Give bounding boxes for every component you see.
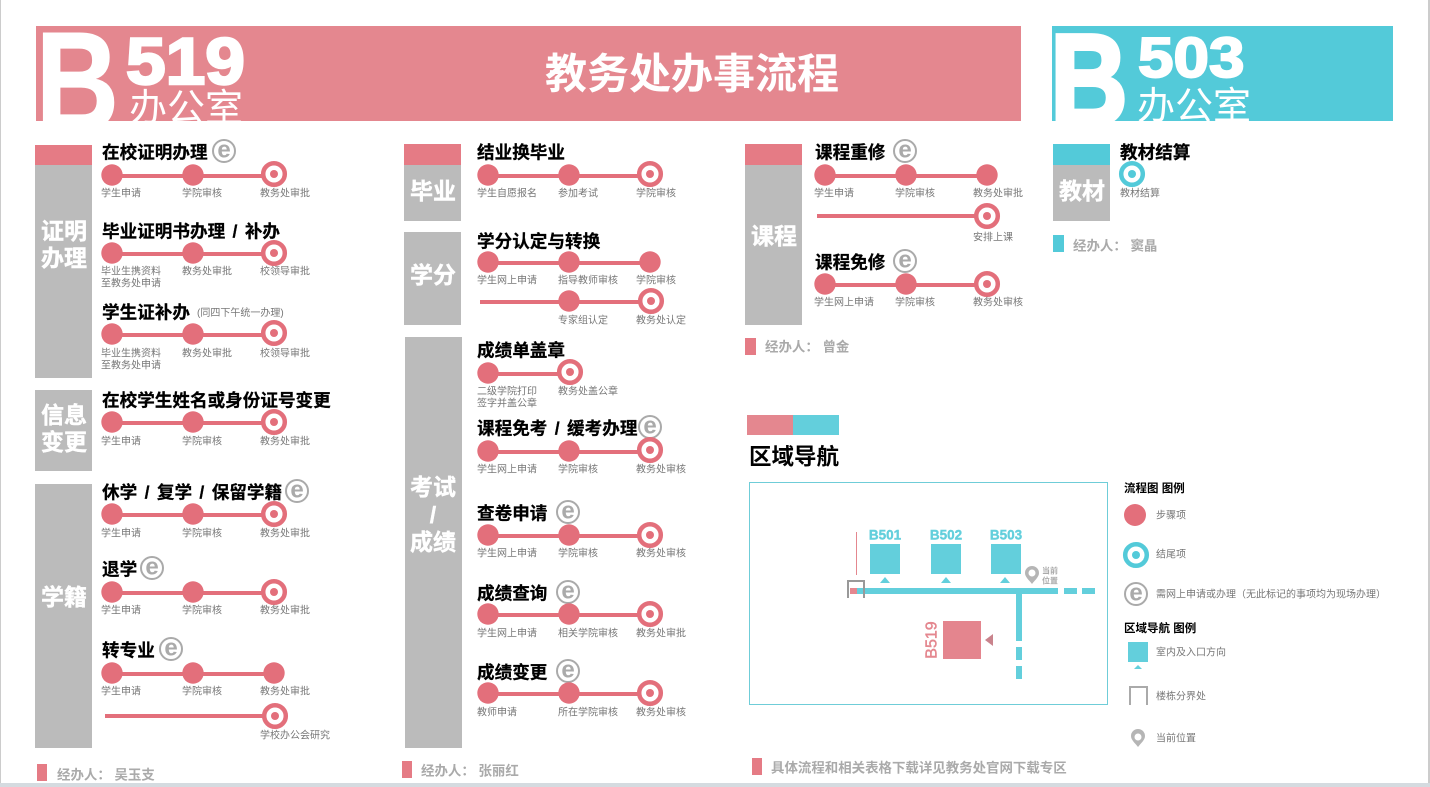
flow: 转专业: 转专业: [102, 640, 155, 660]
flow: 查卷申请: 学生网上申请: [477, 547, 537, 560]
legend item: boundary: 楼栋分界处: [1156, 690, 1206, 703]
flow: 课程重修: 课程重修: [815, 142, 886, 162]
legend item: step: 步骤项: [1156, 510, 1186, 522]
flow: 学分认定与转换: 学生网上申请: [477, 274, 537, 287]
legend: 区域导航 图例: 区域导航 图例: [1124, 621, 1196, 635]
flow: 课程免考 / 缓考办理: 学院审核: [558, 463, 598, 476]
flow: 结业换毕业: 学生自愿报名: [477, 187, 537, 200]
legend item: online: e: [1129, 580, 1143, 606]
flow: 结业换毕业: 参加考试: [558, 187, 598, 200]
flow: 退学: 教务处审批: [260, 604, 310, 617]
flow: 毕业证明书办理 / 补办: 校领导审批: [260, 265, 310, 278]
room B519: [924, 621, 993, 659]
category: 信息变更: [35, 390, 92, 471]
flow: 课程重修: [814, 136, 1023, 244]
flow: 学生证补办: 校领导审批: [260, 347, 310, 360]
heading: 区域导航: 区域导航: [749, 444, 840, 470]
current position pin: 位置: [1042, 576, 1058, 586]
room B502: B502: [930, 528, 962, 542]
flow: 课程免修: e: [898, 246, 912, 274]
flow: 课程免考 / 缓考办理: 教务处审核: [636, 463, 686, 476]
flow: 成绩单盖章: 二级学院打印: [477, 385, 537, 398]
flow: 成绩查询: [477, 578, 686, 640]
flow: 退学: [101, 554, 310, 617]
current position pin: 当前: [1042, 566, 1058, 576]
flow: 学分认定与转换: 学分认定与转换: [477, 232, 601, 252]
category: 教材: [1053, 144, 1110, 221]
category: 信息变更: 信息: [41, 402, 87, 428]
current position pin: [1025, 566, 1058, 586]
flow: 成绩查询: 成绩查询: [477, 584, 547, 604]
flow: 学分认定与转换: 学院审核: [636, 274, 676, 287]
category: 证明办理: [35, 145, 92, 378]
flow: 毕业证明书办理 / 补办: 至教务处申请: [101, 277, 161, 290]
flow: 休学 / 复学 / 保留学籍: 教务处审批: [260, 527, 310, 540]
legend item: room: 室内及入口方向: [1156, 646, 1226, 659]
room B519: B519: [924, 621, 940, 659]
flow: 在校学生姓名或身份证号变更: 教务处审批: [260, 435, 310, 448]
flow: 转专业: 教务处审批: [260, 685, 310, 698]
flow: 学分认定与转换: 教务处认定: [636, 314, 686, 327]
flow: 在校学生姓名或身份证号变更: 学生申请: [101, 435, 141, 448]
flow: 在校学生姓名或身份证号变更: 学院审核: [182, 435, 222, 448]
category: 学分: [404, 232, 461, 325]
flow: 在校证明办理: 学院审核: [182, 187, 222, 200]
flow: 教材结算: [1120, 142, 1190, 200]
flow: 查卷申请: 查卷申请: [477, 504, 548, 524]
flow: 在校证明办理: e: [217, 136, 231, 164]
flow: 成绩变更: 教务处审核: [636, 706, 686, 719]
legend item: end: 结尾项: [1156, 548, 1186, 561]
room B501: [869, 528, 902, 583]
flow: 课程免考 / 缓考办理: e: [643, 412, 657, 440]
legend item: end: [1125, 544, 1186, 566]
flow: 课程免修: 学生网上申请: [814, 296, 874, 309]
flow: 成绩单盖章: 成绩单盖章: [477, 340, 565, 360]
flow: 休学 / 复学 / 保留学籍: 休学 / 复学 / 保留学籍: [102, 482, 282, 502]
flow: 转专业: 学院审核: [182, 685, 222, 698]
flow: 成绩查询: e: [561, 578, 575, 604]
map: floor navigation: [750, 482, 1108, 704]
flow: 休学 / 复学 / 保留学籍: e: [290, 476, 304, 504]
flow: 学生证补办: 毕业生携资料: [101, 347, 161, 360]
flow: 课程重修: 教务处审批: [973, 187, 1023, 200]
header: B503 office banner: 办公室: [1137, 86, 1251, 128]
flow: 在校学生姓名或身份证号变更: [101, 390, 331, 448]
flow: 课程免考 / 缓考办理: 学生网上申请: [477, 463, 537, 476]
category: 毕业: 毕业: [410, 178, 456, 204]
category: 考试 / 成绩: /: [430, 502, 437, 528]
contact: 曾金: 经办人： 曾金: [765, 338, 850, 354]
flow: 课程免考 / 缓考办理: [477, 412, 686, 476]
category: 证明办理: 办理: [41, 245, 87, 271]
flow: 查卷申请: 教务处审核: [636, 547, 686, 560]
flow: 学分认定与转换: [477, 232, 686, 327]
flow: 查卷申请: 学院审核: [558, 547, 598, 560]
flow: 休学 / 复学 / 保留学籍: 学院审核: [182, 527, 222, 540]
flow: 成绩查询: 相关学院审核: [558, 627, 618, 640]
legend item: step: [1124, 504, 1186, 526]
category: 学籍: 学籍: [41, 584, 87, 610]
room B503: B503: [990, 528, 1023, 542]
flow: 课程免修: 课程免修: [815, 252, 886, 272]
flow: 课程免修: 学院审核: [895, 296, 935, 309]
category: 信息变更: 变更: [41, 429, 87, 455]
flow: 学生证补办: 教务处审批: [182, 347, 232, 360]
flow: 转专业: 学生申请: [101, 685, 141, 698]
flow: 结业换毕业: 结业换毕业: [477, 142, 565, 162]
contact: 窦晶: [1053, 235, 1157, 254]
flow: 在校证明办理: 教务处审批: [260, 187, 310, 200]
legend item: pin: 当前位置: [1156, 732, 1196, 745]
contact: 张丽红: 经办人： 张丽红: [421, 762, 519, 778]
legend: 区域导航 图例: [1124, 621, 1226, 747]
flow: 结业换毕业: 学院审核: [636, 187, 676, 200]
category: 毕业: [404, 144, 461, 221]
footer note: 具体流程和相关表格下载详见教务处官网下载专区: [771, 760, 1067, 776]
flow: 休学 / 复学 / 保留学籍: [101, 476, 310, 540]
flow: 成绩变更: e: [561, 656, 575, 684]
contact: 吴玉支: [37, 764, 155, 782]
flow: 查卷申请: e: [561, 498, 575, 524]
flow: 毕业证明书办理 / 补办: [101, 222, 310, 290]
flow: 休学 / 复学 / 保留学籍: 学生申请: [101, 527, 141, 540]
flow: 课程重修: e: [898, 136, 912, 164]
flow: 退学: 退学: [102, 560, 137, 580]
flow: 在校证明办理: 在校证明办理: [102, 142, 208, 162]
flow: 学生证补办: 学生证补办: [102, 302, 190, 322]
flow: 在校证明办理: [101, 136, 310, 200]
flow: 退学: 学院审核: [182, 604, 222, 617]
room B502: [930, 528, 962, 583]
flow: 成绩单盖章: [477, 340, 618, 410]
flow: 成绩变更: 教师申请: [477, 706, 517, 719]
flow: 查卷申请: [477, 498, 686, 560]
header: B519 office banner: 519: [126, 24, 245, 98]
legend: 流程图 图例: [1124, 481, 1386, 606]
title: 教务处办事流程: [545, 50, 839, 98]
header: B519 office banner: [36, 26, 1021, 121]
header: B519 office banner: 办公室: [129, 88, 243, 130]
contact: 吴玉支: 经办人： 吴玉支: [57, 766, 155, 782]
header: B519 office banner: B: [36, 3, 119, 161]
room B501: B501: [869, 528, 902, 542]
header: B503 office banner: 503: [1138, 25, 1244, 89]
flow: 成绩变更: [477, 656, 686, 719]
room B503: [990, 528, 1023, 583]
category: 考试 / 成绩: 考试: [410, 474, 456, 500]
flow: 学生证补办: (同四下午统一办理): [197, 306, 284, 319]
flow: 毕业证明书办理 / 补办: 毕业生携资料: [101, 265, 161, 278]
legend item: online: [1125, 580, 1386, 606]
flow: 教材结算: 教材结算: [1120, 187, 1160, 200]
flow: 在校学生姓名或身份证号变更: 在校学生姓名或身份证号变更: [102, 390, 331, 410]
flow: 成绩单盖章: 签字并盖公章: [477, 397, 537, 410]
category: 教材: 教材: [1059, 178, 1105, 204]
flow: 成绩变更: 成绩变更: [477, 662, 548, 682]
flow: 成绩单盖章: 教务处盖公章: [558, 385, 618, 398]
flow: 结业换毕业: [477, 142, 676, 200]
category: 考试 / 成绩: [405, 337, 462, 748]
flow: 课程免修: 教务处审核: [973, 296, 1023, 309]
category: 学分: 学分: [410, 262, 456, 288]
flow: 成绩查询: 教务处审批: [636, 627, 686, 640]
legend: 流程图 图例: 流程图 图例: [1124, 481, 1185, 495]
flow: 成绩查询: 学生网上申请: [477, 627, 537, 640]
header: B503 office banner: B: [1050, 8, 1128, 153]
flow: 退学: 学生申请: [101, 604, 141, 617]
flow: 转专业: [101, 634, 330, 742]
contact: 窦晶: 经办人： 窦晶: [1073, 238, 1157, 254]
flow: 学分认定与转换: 专家组认定: [558, 314, 608, 327]
legend item: online: 需网上申请或办理（无此标记的事项均为现场办理）: [1156, 588, 1386, 601]
flow: 课程重修: 学院审核: [895, 187, 935, 200]
corridors: [850, 588, 1095, 679]
flow: 课程重修: 学生申请: [814, 187, 854, 200]
category: 课程: [745, 144, 802, 325]
flow: 教材结算: 教材结算: [1120, 142, 1190, 162]
flow: 在校证明办理: 学生申请: [101, 187, 141, 200]
flow: 学生证补办: [101, 302, 310, 372]
heading: 区域导航: [747, 415, 840, 470]
category: 课程: 课程: [751, 223, 797, 249]
flow: 毕业证明书办理 / 补办: 教务处审批: [182, 265, 232, 278]
flow: 退学: e: [145, 554, 159, 580]
flow: 学生证补办: 至教务处申请: [101, 359, 161, 372]
header: B503 office banner: [1052, 26, 1393, 121]
category: 证明办理: 证明: [41, 218, 87, 244]
flow: 课程重修: 安排上课: [973, 231, 1013, 244]
flow: 毕业证明书办理 / 补办: 毕业证明书办理 / 补办: [102, 222, 280, 242]
flow: 课程免修: [814, 246, 1023, 309]
flow: 转专业: e: [164, 634, 178, 662]
building boundary marker: [848, 581, 864, 598]
flow: 课程免考 / 缓考办理: 课程免考 / 缓考办理: [477, 418, 638, 438]
category: 学籍: [35, 484, 92, 748]
flow: 学分认定与转换: 指导教师审核: [558, 274, 618, 287]
flow: 转专业: 学校办公会研究: [260, 729, 330, 742]
category: 考试 / 成绩: 成绩: [410, 529, 456, 555]
flow: 成绩变更: 所在学院审核: [558, 706, 618, 719]
